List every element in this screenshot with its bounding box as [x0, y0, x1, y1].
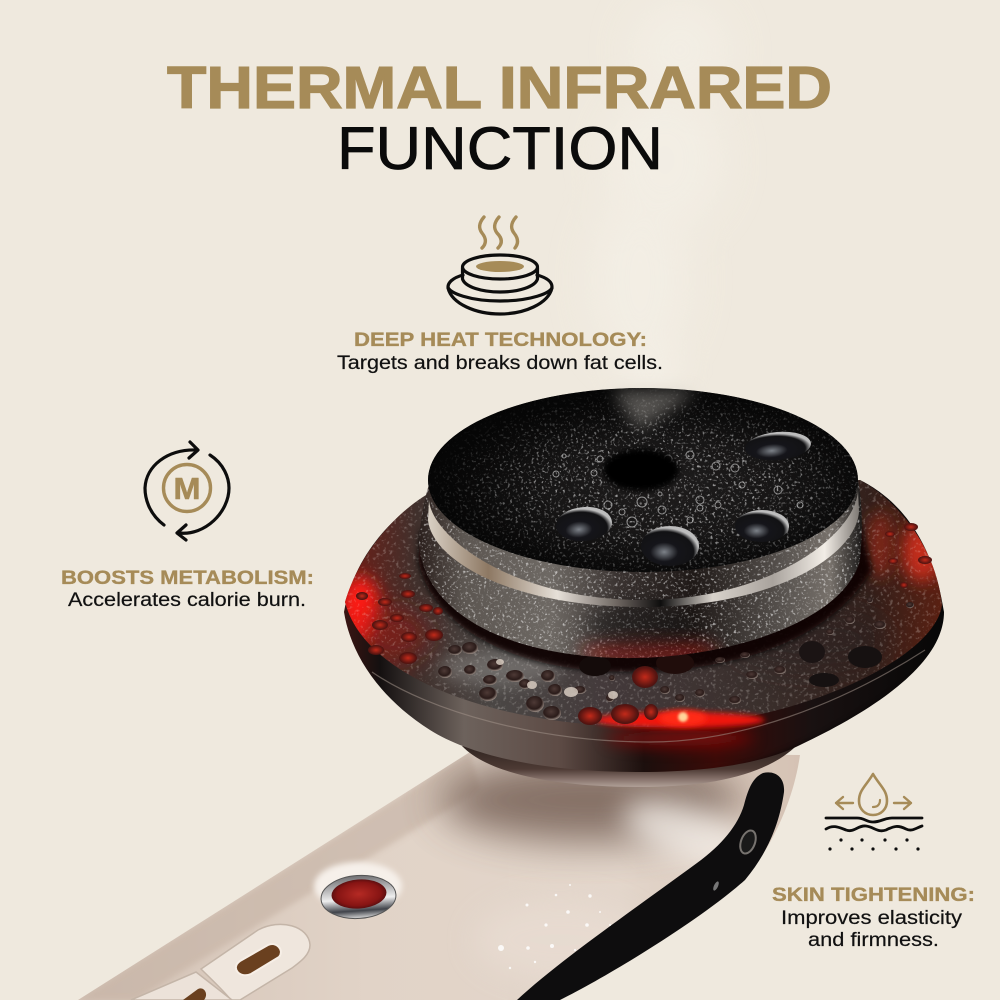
rim shading [604, 688, 895, 761]
control pad lower [131, 972, 232, 1000]
title [167, 55, 832, 182]
rising steam wisp [612, 390, 698, 430]
text block: skin tightening [772, 885, 975, 951]
red glow areas [340, 480, 950, 740]
cap small bubbles [553, 451, 803, 527]
letter M: M [174, 471, 200, 506]
text block: boosts metabolism: Accelerates calorie burn. [68, 590, 306, 611]
lens upper right [744, 429, 812, 463]
plate [448, 275, 552, 314]
right arrow [894, 797, 911, 809]
steam lines [480, 217, 518, 248]
text block: skin tightening: SKIN TIGHTENING: [772, 885, 975, 906]
front red glow [595, 712, 765, 728]
icon: steaming dish [448, 217, 552, 314]
text block: boosts metabolism: BOOSTS METABOLISM: [61, 568, 314, 589]
bowl underside [462, 742, 800, 787]
drop highlight [873, 800, 880, 807]
cap top texture [428, 388, 858, 572]
wave line [826, 826, 922, 831]
lens left [555, 505, 613, 543]
black side strip [517, 772, 784, 1000]
bowl [462, 255, 538, 292]
rim highlight [372, 650, 925, 742]
text block: deep heat technology: DEEP HEAT TECHNOLOGY: [354, 330, 647, 351]
jack [737, 828, 759, 856]
red spark [659, 710, 707, 726]
led button [314, 862, 402, 921]
text block: deep heat technology: Targets and breaks down fat cells. [337, 353, 663, 374]
gold ring [164, 464, 210, 512]
cap top [428, 388, 858, 572]
text block: skin tightening: and firmness. [808, 930, 939, 951]
outer disc body [344, 480, 944, 772]
shadow under cap [418, 520, 872, 672]
device photo [78, 388, 950, 1000]
dots [828, 838, 920, 851]
cap side texture [415, 480, 865, 664]
ring water droplets [356, 523, 932, 725]
title line 1: THERMAL INFRARED [167, 55, 832, 121]
centre lens [603, 449, 679, 491]
water speckles on handle [498, 884, 611, 969]
small port [712, 881, 720, 891]
water drop [859, 774, 887, 815]
skin lines [826, 818, 922, 822]
cap chrome lip [428, 490, 859, 607]
ring top surface [345, 480, 942, 727]
slot [236, 944, 281, 975]
left arrow [836, 797, 853, 809]
text block: skin tightening: Improves elasticity [781, 908, 963, 929]
soup [476, 261, 524, 272]
lens front [641, 526, 699, 566]
cycle arrows [145, 442, 229, 540]
text block: boosts metabolism [61, 568, 314, 611]
title line 2: FUNCTION [337, 115, 663, 182]
steam plume [590, 0, 730, 410]
text block: deep heat technology [337, 330, 663, 374]
icon: metabolism cycle [145, 442, 229, 540]
cap side band [419, 480, 862, 658]
control pad upper [201, 924, 310, 1000]
lower slot [183, 988, 206, 1000]
lens right [735, 510, 789, 542]
handle [78, 752, 800, 1000]
icon: skin drop [826, 774, 922, 851]
